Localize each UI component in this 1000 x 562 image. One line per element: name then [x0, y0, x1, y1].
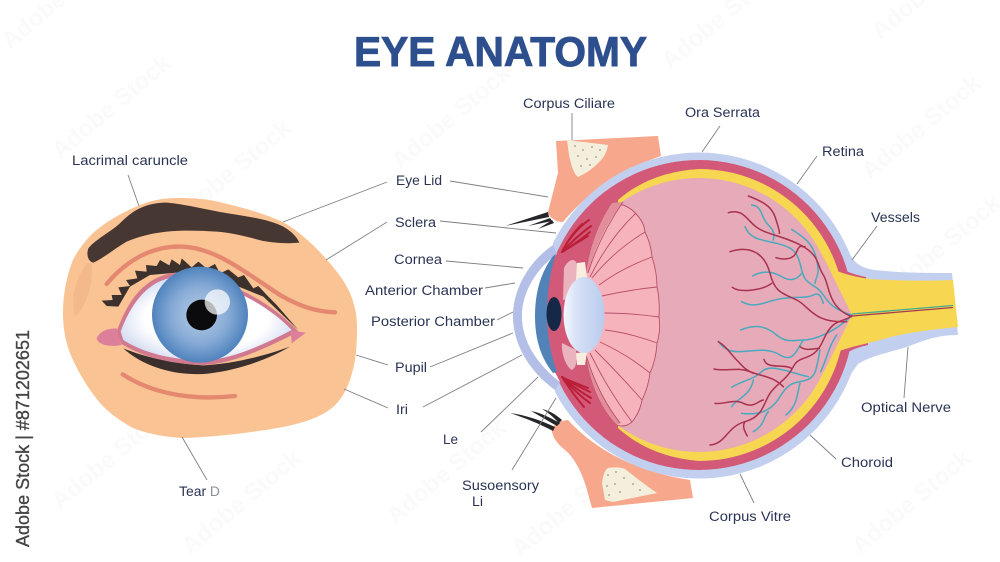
pupil	[186, 300, 217, 330]
labels: Ora Serrata	[685, 105, 761, 120]
stock credit vertical text: Adobe Stock | #871202651	[12, 330, 33, 547]
upper eyelid fold	[107, 247, 335, 312]
retinal vessels	[710, 196, 852, 445]
vitreous body	[620, 178, 852, 452]
labels: Iri	[396, 402, 408, 417]
labels: Choroid	[841, 455, 893, 470]
labels: Le	[443, 432, 458, 447]
ciliary muscle lower	[562, 377, 591, 407]
labels: Posterior Chamber	[371, 314, 496, 329]
text: Adobe Stock	[177, 444, 307, 560]
corneal highlight	[205, 289, 230, 315]
upper eyelashes	[102, 258, 298, 330]
labels: Sclera	[395, 215, 437, 230]
text: Adobe Stock	[387, 59, 517, 175]
nerve fibres	[852, 306, 953, 314]
labels: Lacrimal caruncle	[72, 153, 188, 168]
title: EYE ANATOMY	[354, 28, 647, 75]
labels	[72, 96, 951, 524]
labels: Cornea	[394, 252, 443, 267]
retina yellow layer	[618, 169, 845, 461]
lens	[564, 277, 604, 353]
lower eye crease	[123, 374, 235, 397]
ciliary body fan	[586, 202, 660, 426]
sclera white	[121, 277, 292, 360]
corpus ciliare tissue	[567, 140, 608, 177]
labels: Pupil	[395, 360, 427, 375]
iris section	[535, 254, 557, 373]
lens suspensory pads	[562, 260, 578, 370]
text: Adobe Stock	[382, 414, 512, 530]
optic nerve	[834, 270, 958, 352]
labels: Tear D	[179, 484, 220, 499]
ciliary muscle upper	[562, 220, 591, 252]
upper eyelid tissue	[548, 136, 661, 222]
text: Adobe Stock	[847, 444, 977, 560]
text: Adobe Stock	[167, 114, 297, 230]
labels: Corpus Vitre	[709, 509, 791, 524]
text: Adobe Stock	[857, 69, 987, 185]
labels: Anterior Chamber	[365, 283, 484, 298]
lens stems	[576, 262, 587, 365]
lower lash line	[123, 347, 290, 374]
face skin patch	[63, 198, 357, 438]
text: Adobe Stock	[47, 399, 177, 515]
text: Adobe Stock	[47, 49, 177, 165]
optic nerve sheath	[848, 250, 958, 378]
leader lines	[128, 113, 908, 503]
choroid red layer	[544, 160, 854, 470]
anterior chamber	[522, 254, 560, 382]
optic nerve lip	[832, 262, 868, 362]
iris	[152, 267, 248, 363]
eyelid rim	[117, 273, 298, 365]
labels: Retina	[822, 144, 865, 159]
labels: Susoensory	[462, 478, 539, 493]
labels: Optical Nerve	[861, 400, 951, 415]
sclera outer layer	[553, 153, 862, 479]
text: Adobe Stock	[507, 447, 637, 562]
red vessels	[710, 196, 852, 445]
pupil section	[546, 297, 562, 331]
labels: Eye Lid	[396, 173, 442, 188]
lower bone tissue	[602, 467, 657, 502]
illustration: external eye	[63, 198, 357, 438]
blue vessels	[718, 205, 852, 432]
caruncle	[97, 328, 122, 346]
labels: Corpus Ciliare	[523, 96, 615, 111]
cornea	[513, 245, 560, 390]
illustration: eye cross-section	[505, 136, 958, 508]
labels: Vessels	[871, 210, 920, 225]
lower eyelid tissue	[552, 420, 693, 508]
eyebrow	[87, 203, 299, 263]
eyelashes	[505, 212, 562, 431]
outer corner	[291, 331, 306, 343]
labels: Li	[472, 494, 483, 509]
